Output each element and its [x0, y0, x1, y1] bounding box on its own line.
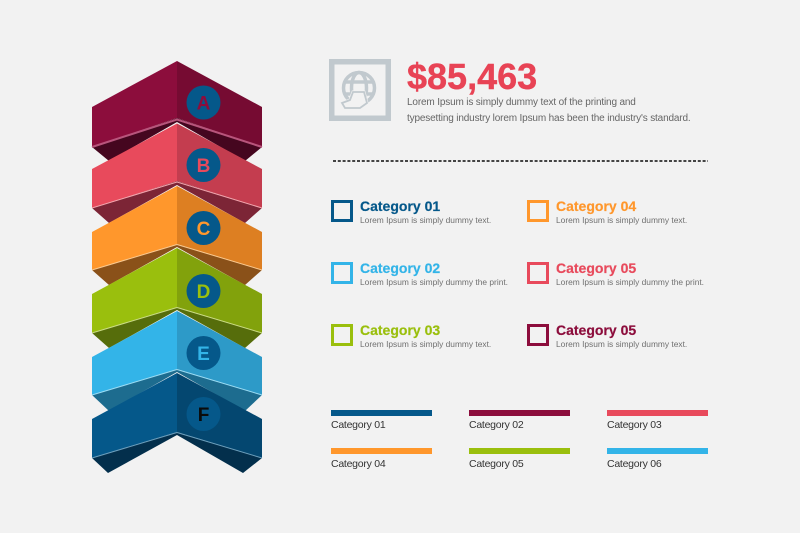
legend item 01: Category 01 — [331, 419, 385, 431]
chevron C — [92, 186, 262, 285]
icon: globe with hand in square frame — [329, 59, 391, 121]
legend item 02: Category 02 — [469, 419, 523, 431]
category 04 item — [527, 198, 687, 225]
chevron B: B — [197, 156, 210, 177]
chevron C: C — [197, 219, 211, 240]
chevron A: A — [197, 94, 211, 114]
category 02 item — [331, 260, 508, 287]
category 03 item: Category 03 — [360, 322, 440, 338]
legend item 06: Category 06 — [607, 458, 661, 470]
category 05 second item — [527, 322, 687, 349]
chevron stack — [92, 61, 262, 473]
legend item 06 — [607, 448, 708, 470]
category 01 item: Lorem Ipsum is simply dummy text. — [360, 215, 491, 225]
legend item 05: Category 05 — [469, 458, 523, 470]
chevron D: D — [197, 282, 210, 303]
legend item 03 — [607, 410, 708, 431]
legend item 04: Category 04 — [331, 458, 385, 470]
category 04 item: Lorem Ipsum is simply dummy text. — [556, 215, 687, 225]
chevron E: E — [197, 344, 210, 365]
legend item 02 — [469, 410, 570, 431]
category 04 item: Category 04 — [556, 198, 636, 214]
category list — [331, 198, 704, 349]
description text — [407, 97, 691, 124]
legend item 04 — [331, 448, 432, 470]
chevron B — [92, 124, 262, 223]
big number: $85,463 — [407, 56, 537, 97]
chevron F: F — [198, 405, 209, 426]
legend item 03: Category 03 — [607, 419, 661, 431]
category 01 item — [331, 198, 491, 225]
dotted divider — [333, 160, 708, 162]
legend item 01 — [331, 410, 432, 431]
description text: Lorem Ipsum is simply dummy text of the printing and — [407, 97, 636, 108]
category 05 item: Category 05 — [556, 260, 636, 276]
chevron E — [92, 311, 262, 411]
category 02 item: Category 02 — [360, 260, 440, 276]
category 05 second item: Category 05 — [556, 322, 636, 338]
category 02 item: Lorem Ipsum is simply dummy the print. — [360, 277, 508, 287]
legend — [331, 410, 708, 470]
legend item 05 — [469, 448, 570, 470]
category 05 second item: Lorem Ipsum is simply dummy text. — [556, 339, 687, 349]
category 03 item: Lorem Ipsum is simply dummy text. — [360, 339, 491, 349]
description text: typesetting industry lorem Ipsum has been the industry's standard. — [407, 113, 691, 124]
chevron D — [92, 248, 262, 348]
chevron F — [92, 373, 262, 473]
category 01 item: Category 01 — [360, 198, 440, 214]
category 03 item — [331, 322, 491, 349]
chevron A — [92, 61, 262, 161]
category 05 item — [527, 260, 704, 287]
category 05 item: Lorem Ipsum is simply dummy the print. — [556, 277, 704, 287]
